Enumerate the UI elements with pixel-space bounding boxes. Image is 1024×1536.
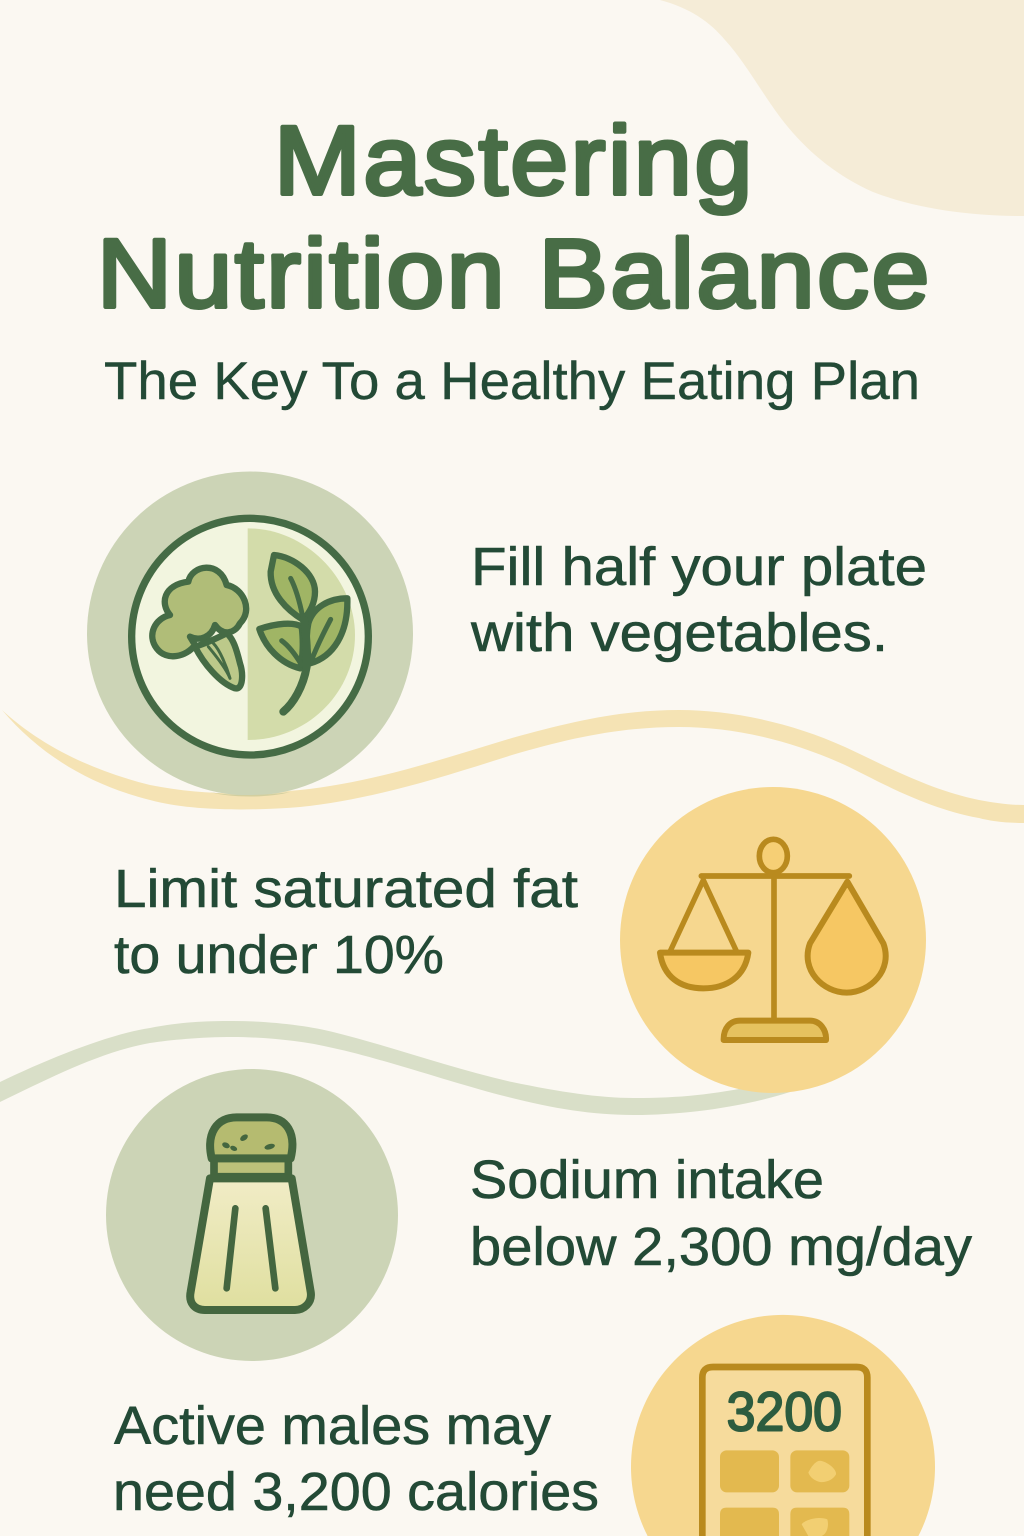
text: sodium: below 2,300 mg/day [470,1217,972,1277]
text: calories [113,1396,599,1522]
panel: saturated fat [114,787,926,1093]
icon: calculator: 3200 [727,1380,842,1442]
text: calories: need 3,200 calories [113,1462,599,1522]
title: Nutrition Balance [97,219,932,328]
text: sodium [470,1150,972,1277]
icon: balance scale [620,787,926,1093]
text: vegetables [470,537,927,663]
subtitle: The Key To a Healthy Eating Plan [104,352,920,411]
icon: plate with broccoli and leaves [87,472,413,796]
panel: vegetables [87,472,927,796]
icon: salt shaker [106,1069,398,1361]
text: saturated fat [114,859,578,985]
title [97,106,932,328]
text: saturated fat: to under 10% [114,925,444,985]
text: sodium: Sodium intake [470,1150,824,1210]
text: saturated fat: Limit saturated fat [114,859,578,919]
title: Mastering [274,106,755,215]
panel: sodium [106,1069,972,1361]
background blob: top right [660,0,1024,216]
decorative wave: green [0,1021,790,1115]
text: calories: Active males may [114,1396,551,1456]
decorative wave: yellow [2,710,1024,823]
text: vegetables: Fill half your plate [471,537,927,597]
text: vegetables: with vegetables. [470,603,888,663]
icon: calculator [631,1315,935,1536]
panel: calories [113,1315,935,1536]
